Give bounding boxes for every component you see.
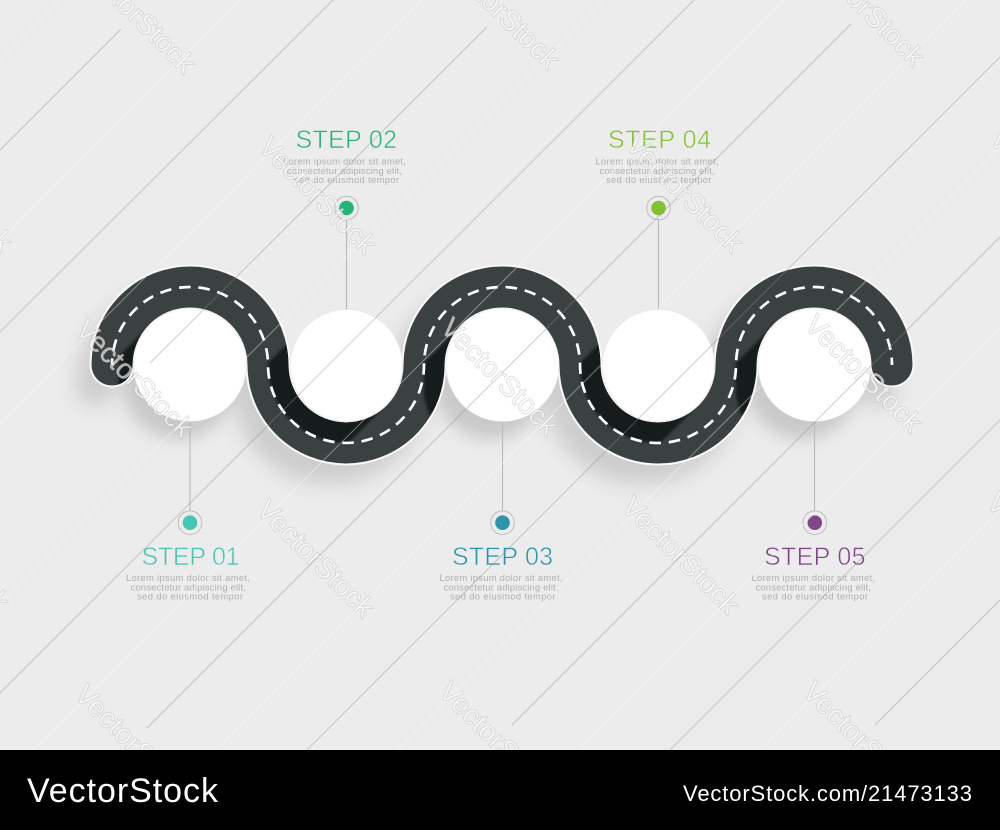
step 02 block: STEP 02 bbox=[296, 126, 397, 154]
VectorStock watermarks: VectorStock bbox=[435, 312, 565, 442]
step 04 block: STEP 04 bbox=[608, 126, 711, 154]
step 04 block bbox=[596, 126, 718, 220]
VectorStock watermarks: VectorStock bbox=[616, 491, 746, 621]
milestone circles bbox=[134, 308, 871, 422]
step 01 block: sed do eiusmod tempor bbox=[137, 590, 243, 602]
step 03 block bbox=[440, 511, 562, 602]
step 04 block: Lorem ipsum dolor sit amet, bbox=[596, 156, 718, 166]
step 01 block: Lorem ipsum dolor sit amet, bbox=[126, 572, 250, 583]
VectorStock watermarks: VectorStock bbox=[251, 494, 381, 624]
VectorStock watermarks: VectorStock bbox=[797, 676, 927, 806]
connector lines bbox=[190, 220, 814, 511]
step 05 block: STEP 05 bbox=[764, 543, 866, 571]
soft drop shadows bbox=[96, 308, 876, 464]
footer bar: VectorStock bbox=[27, 772, 219, 810]
step 02 block: consectetur adipiscing elit, bbox=[287, 165, 402, 176]
step 05 block: consectetur adipiscing elit, bbox=[756, 582, 871, 592]
step 03 block: STEP 03 bbox=[452, 543, 553, 571]
step 01 block: STEP 01 bbox=[142, 543, 240, 571]
step 04 block: consectetur adipiscing elit, bbox=[600, 165, 714, 176]
step 02 block bbox=[283, 126, 406, 220]
step 05 block: sed do eiusmod tempor bbox=[762, 590, 868, 602]
VectorStock watermarks: VectorStock bbox=[433, 676, 563, 806]
VectorStock watermarks: VectorStock bbox=[799, 309, 929, 439]
VectorStock watermarks: VectorStock bbox=[69, 679, 199, 809]
step 03 block: consectetur adipiscing elit, bbox=[444, 582, 558, 592]
step 01 block bbox=[126, 511, 250, 602]
step 05 block: Lorem ipsum dolor sit amet, bbox=[752, 572, 875, 583]
VectorStock watermarks: VectorStock bbox=[253, 131, 383, 261]
winding road bbox=[112, 287, 892, 443]
footer bar bbox=[0, 750, 1000, 830]
step 05 block bbox=[752, 511, 875, 602]
VectorStock watermarks: VectorStock bbox=[620, 129, 750, 259]
step 02 block: sed do eiusmod tempor bbox=[294, 174, 399, 185]
footer bar: VectorStock.com/21473133 bbox=[683, 781, 972, 806]
VectorStock watermarks: VectorStock bbox=[70, 314, 200, 444]
step 04 block: sed do eiusmod tempor bbox=[606, 174, 712, 185]
step 03 block: sed do eiusmod tempor bbox=[450, 590, 556, 602]
step 02 block: Lorem ipsum dolor sit amet, bbox=[283, 156, 406, 166]
step 01 block: consectetur adipiscing elit, bbox=[130, 582, 246, 592]
step 03 block: Lorem ipsum dolor sit amet, bbox=[440, 572, 562, 583]
